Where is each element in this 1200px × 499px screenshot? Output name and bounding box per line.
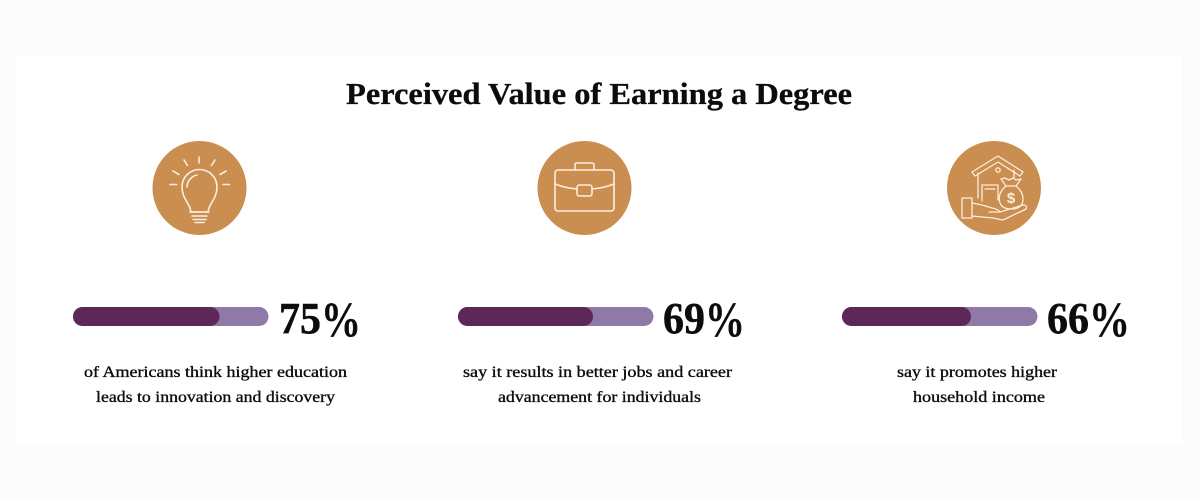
description: careers [463,364,733,406]
stat: 75% [279,291,361,347]
title: Perceived Value of Earning a Degree [346,76,852,111]
description: income [897,364,1058,406]
progress bar: 75% [73,307,268,326]
icon: briefcase [538,141,632,235]
description: innovation: leads to innovation and discovery [96,389,335,406]
description: income: household income [913,389,1045,406]
stat: 69%: % [705,291,745,347]
panel: innovation [73,141,361,406]
progress bar: 69% [458,307,654,326]
progress bar: 66% [842,307,1038,326]
panel: income [842,141,1130,406]
panel: careers [458,141,745,406]
description: innovation: of Americans think higher education [84,364,347,381]
description: income: say it promotes higher [897,364,1058,381]
icon: house, money bag and hand: $ [1007,190,1016,207]
description: careers: advancement for individuals [498,389,701,406]
stat: 69%: 69 [663,294,705,343]
stat: 75%: % [321,291,361,347]
description: innovation [84,364,347,406]
stat: 75%: 75 [279,294,321,343]
stat: 69% [663,291,745,347]
icon: light bulb [152,141,246,235]
icon: house, money bag and hand [947,141,1041,235]
stat: 66% [1047,291,1130,347]
stat: 66%: 66 [1047,294,1089,343]
stat: 66%: % [1089,291,1130,347]
description: careers: say it results in better jobs and career [463,364,733,381]
